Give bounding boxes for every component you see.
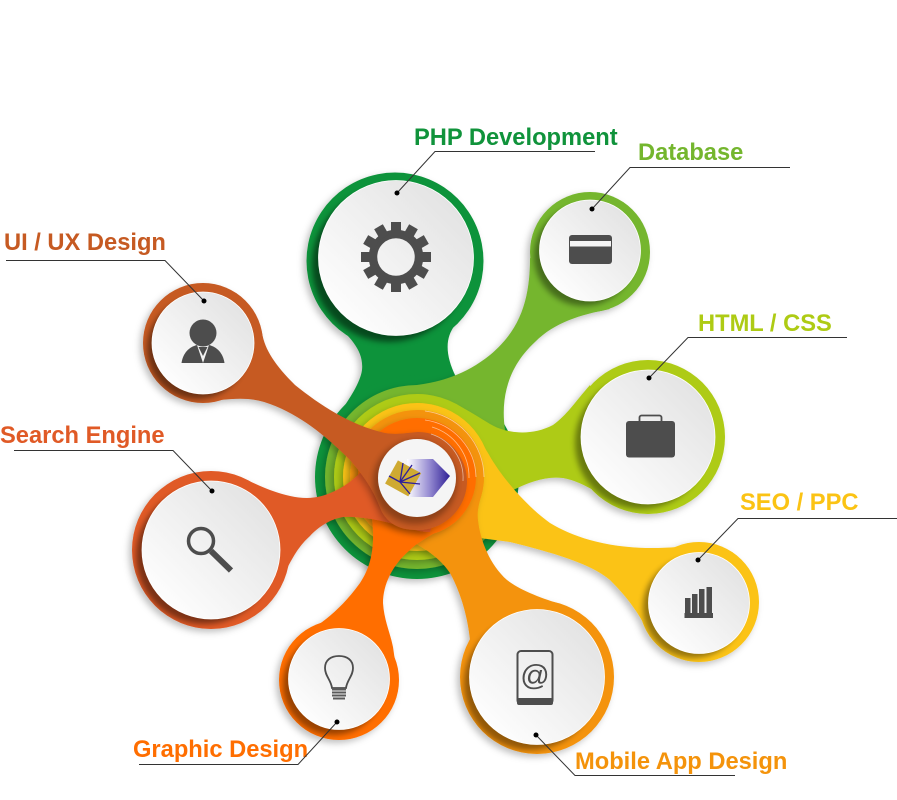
icon: gear — [348, 209, 444, 305]
PHP Development branch — [306, 172, 519, 579]
label: UI / UX Design — [4, 230, 206, 304]
Graphic stem and node — [279, 418, 476, 740]
label: PHP Development — [394, 125, 618, 196]
PHP stem and node — [306, 172, 519, 579]
label: Mobile App Design — [534, 732, 787, 776]
icon: briefcase — [626, 416, 675, 458]
label: HTML / CSS: HTML / CSS — [698, 311, 832, 337]
icon: tablet — [517, 651, 553, 705]
Database branch — [325, 192, 650, 569]
Graphic Design branch — [279, 418, 476, 740]
SEO stem and node — [343, 403, 759, 662]
Search Engine branch — [132, 471, 440, 629]
Database stem and node — [325, 192, 650, 569]
label: Database — [590, 140, 790, 212]
label: SEO / PPC — [696, 490, 897, 562]
label: Database: Database — [638, 140, 743, 166]
label: Search Engine — [0, 423, 214, 494]
HTML / CSS branch — [334, 360, 725, 560]
UI stem and node — [143, 283, 467, 530]
label: Mobile App Design: Mobile App Design — [575, 749, 787, 775]
Mobile App Design branch — [350, 410, 614, 754]
icon: light bulb — [325, 656, 353, 700]
HTML stem and node — [334, 360, 725, 560]
label: SEO / PPC: SEO / PPC — [740, 490, 858, 516]
label: Graphic Design — [133, 720, 340, 764]
icon: person — [182, 320, 224, 363]
icon: bar chart — [684, 587, 713, 618]
label: Search Engine: Search Engine — [0, 423, 165, 449]
label: UI / UX Design: UI / UX Design — [4, 230, 166, 256]
label: Graphic Design: Graphic Design — [133, 737, 308, 763]
label: PHP Development: PHP Development — [414, 125, 618, 151]
icon: tablet: @ — [520, 660, 550, 692]
icon: card — [569, 235, 612, 264]
Mobile stem and node — [350, 410, 614, 754]
UI / UX Design branch — [143, 283, 467, 530]
SEO / PPC branch — [343, 403, 759, 662]
label: HTML / CSS — [646, 311, 847, 380]
logo mark — [385, 459, 450, 497]
icon: magnifier — [188, 528, 231, 570]
Search stem and node — [132, 471, 440, 629]
centre hub with logo — [373, 411, 484, 524]
